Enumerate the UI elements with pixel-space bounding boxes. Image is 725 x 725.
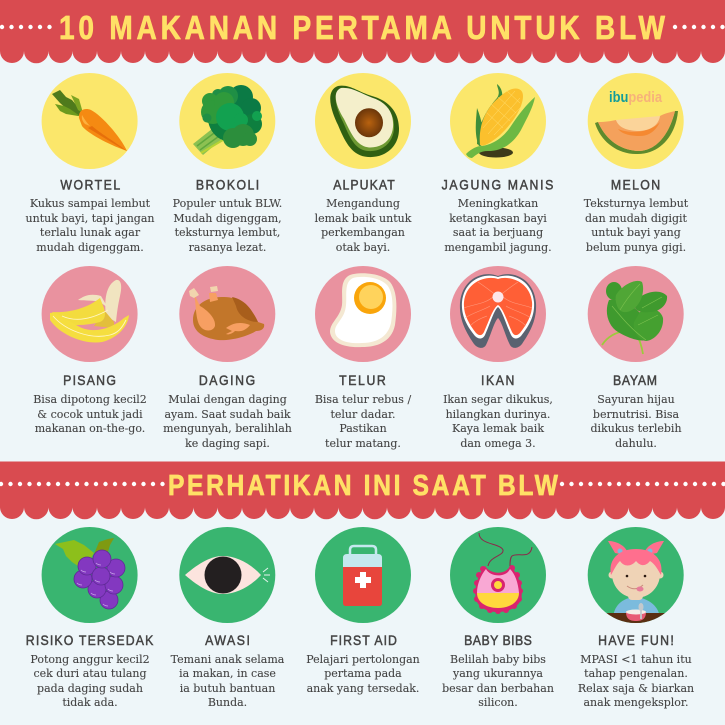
description: melon: untuk bayi yang [591,226,681,239]
description: baby bibs: besar dan berbahan [442,682,554,695]
description: daging: Mulai dengan daging [168,393,287,406]
label: melon: MELON [611,177,660,193]
icon: eye [185,556,270,594]
label: risiko tersedak: RISIKO TERSEDAK [26,632,154,648]
description: have fun: tahap pengenalan. [584,667,688,680]
panel: risiko tersedak [26,527,154,709]
panel: daging [163,266,292,450]
description: bayam: Sayuran hijau [597,393,675,406]
description: first aid: anak yang tersedak. [307,682,419,695]
description: alpukat: Mengandung [326,197,400,210]
icon: chicken [189,286,264,340]
description: have fun: anak mengeksplor. [584,696,688,709]
description: wortel: terlalu lunak agar [40,226,141,239]
label: pisang: PISANG [63,372,116,388]
icon: salmon steak [460,274,536,348]
description: alpukat: otak bayi. [336,241,390,254]
label: bayam: BAYAM [613,372,657,388]
description: have fun: MPASI <1 tahun itu [580,653,692,666]
panel: pisang [33,266,147,435]
description: ikan: dan omega 3. [460,437,536,450]
description: bayam: bernutrisi. Bisa [593,408,680,421]
description: awasi: Temani anak selama [171,653,285,666]
label: first aid: FIRST AID [330,632,397,648]
panel: alpukat [315,73,412,254]
label: have fun: HAVE FUN! [598,632,674,648]
icon: bib [473,533,532,614]
icon: girl eating [606,541,665,625]
description: baby bibs: yang ukurannya [452,667,543,680]
label: baby bibs: BABY BIBS [464,632,532,648]
description: bayam: dahulu. [615,437,657,450]
description: daging: ayam. Saat sudah baik [164,408,291,421]
description: pisang: makanan on-the-go. [35,422,145,435]
panel: ikan [443,266,553,450]
second banner [0,462,725,519]
label: brokoli: BROKOLI [196,177,259,193]
description: telur: Bisa telur rebus / [315,393,411,406]
description: ikan: Ikan segar dikukus, [443,393,553,406]
description: risiko tersedak: tidak ada. [62,696,118,709]
label: alpukat: ALPUKAT [333,177,395,193]
label: wortel: WORTEL [60,177,120,193]
heading: perhatikan: PERHATIKAN INI SAAT BLW [168,469,558,501]
description: risiko tersedak: cek duri atau tulang [33,667,147,680]
description: first aid: Pelajari pertolongan [306,653,420,666]
label: daging: DAGING [199,372,255,388]
panel: melon [584,73,689,254]
label: awasi: AWASI [205,632,250,648]
icon: carrot [52,90,127,151]
description: have fun: Relax saja & biarkan [578,682,694,695]
description: melon: Teksturnya lembut [584,197,689,210]
label: jagung manis: JAGUNG MANIS [442,177,554,193]
description: pisang: & cocok untuk jadi [37,408,143,421]
panel: telur [315,266,411,450]
description: wortel: Kukus sampai lembut [30,197,151,210]
description: awasi: Bunda. [208,696,247,709]
description: jagung manis: mengambil jagung. [444,241,552,254]
description: baby bibs: Belilah baby bibs [450,653,546,666]
description: daging: ke daging sapi. [185,437,270,450]
description: first aid: pertama pada [324,667,402,680]
logo: ibupedia: ibupedia [609,90,663,106]
label: telur: TELUR [339,372,386,388]
panel: awasi [171,527,285,709]
panel: have fun [578,527,694,709]
label: ikan: IKAN [481,372,514,388]
description: brokoli: Mudah digenggam, [173,212,282,225]
description: jagung manis: saat ia berjuang [453,226,543,239]
description: ikan: Kaya lemak baik [452,422,544,435]
description: alpukat: lemak baik untuk [315,212,412,225]
description: daging: mengunyah, beralihlah [163,422,292,435]
icon: first aid kit [343,546,382,606]
description: melon: belum punya gigi. [586,241,686,254]
icon: grapes [55,538,125,609]
panel: brokoli [173,73,282,254]
icon: avocado [330,86,399,157]
panel: bayam [588,266,684,450]
description: telur: telur dadar. [330,408,396,421]
description: jagung manis: Meningkatkan [458,197,538,210]
description: melon: dan mudah digigit [585,212,688,225]
description: risiko tersedak: Potong anggur kecil2 [30,653,150,666]
icon: banana [50,280,129,343]
description: awasi: ia butuh bantuan [180,682,275,695]
top banner [0,0,725,63]
description: telur: Pastikan [339,422,387,435]
description: brokoli: teksturnya lembut, [175,226,280,239]
icon: spinach [602,281,667,354]
panel: wortel [26,73,154,254]
description: risiko tersedak: pada daging sudah [37,682,143,695]
description: pisang: Bisa dipotong kecil2 [33,393,147,406]
icon: fried egg [330,273,396,347]
description: telur: telur matang. [325,437,401,450]
description: wortel: untuk bayi, tapi jangan [26,212,154,225]
panel: jagung manis [442,73,554,254]
icon: broccoli [193,85,262,155]
description: wortel: mudah digenggam. [36,241,144,254]
description: ikan: hilangkan durinya. [446,408,550,421]
description: baby bibs: silicon. [478,696,518,709]
panel: baby bibs [442,527,554,709]
description: jagung manis: ketangkasan bayi [449,212,547,225]
description: brokoli: Populer untuk BLW. [173,197,282,210]
description: brokoli: rasanya lezat. [189,241,266,254]
description: bayam: dikukus terlebih [590,422,682,435]
description: alpukat: perkembangan [321,226,405,239]
icon: corn [466,84,535,158]
title: 10 MAKANAN PERTAMA UNTUK BLW [59,10,665,46]
panel: first aid [306,527,420,695]
icon: melon [595,111,678,154]
description: awasi: ia makan, in case [179,667,276,680]
